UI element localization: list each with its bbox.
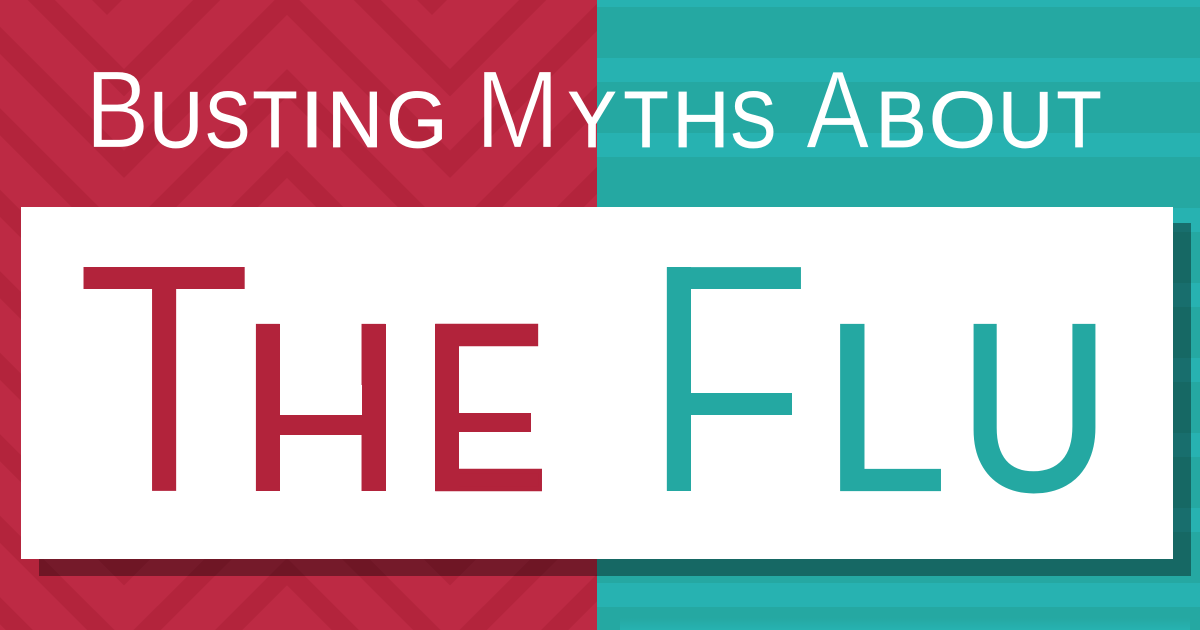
heading: The: E xyxy=(421,274,548,540)
heading: Busting Myths About: S xyxy=(730,74,776,164)
heading: Busting Myths About: Y xyxy=(568,76,616,165)
heading: The: H xyxy=(239,274,403,541)
heading: Busting Myths About: N xyxy=(327,75,383,164)
heading: Busting Myths About: O xyxy=(929,74,996,164)
heading: The: T xyxy=(76,194,253,563)
heading: The xyxy=(76,194,548,563)
heading: Busting Myths About: B xyxy=(86,47,149,171)
heading: Busting Myths About: T xyxy=(1056,75,1102,165)
panel: red chevron background xyxy=(0,0,597,630)
heading: Busting Myths About: H xyxy=(672,75,729,164)
heading: Busting Myths About xyxy=(94,72,1100,148)
heading: Busting Myths About: B xyxy=(876,74,927,164)
heading: Busting Myths About: U xyxy=(998,74,1053,164)
heading: Busting Myths About: M xyxy=(475,48,560,172)
heading: Busting Myths About: T xyxy=(624,75,669,165)
heading: Flu: F xyxy=(642,194,814,563)
panel: teal striped background xyxy=(597,0,1200,630)
heading: Busting Myths About: S xyxy=(205,75,250,164)
heading: Busting Myths About: A xyxy=(806,48,870,171)
card drop shadow xyxy=(39,223,1191,576)
heading: Busting Myths About: I xyxy=(300,75,324,164)
heading: Flu: U xyxy=(959,275,1110,540)
heading: Busting Myths About: T xyxy=(252,75,298,165)
heading: Busting Myths About: G xyxy=(386,74,447,164)
heading: Flu: L xyxy=(824,275,946,540)
heading: Flu xyxy=(642,194,1110,563)
white title card xyxy=(21,207,1173,559)
heading: Busting Myths About: U xyxy=(149,76,203,165)
